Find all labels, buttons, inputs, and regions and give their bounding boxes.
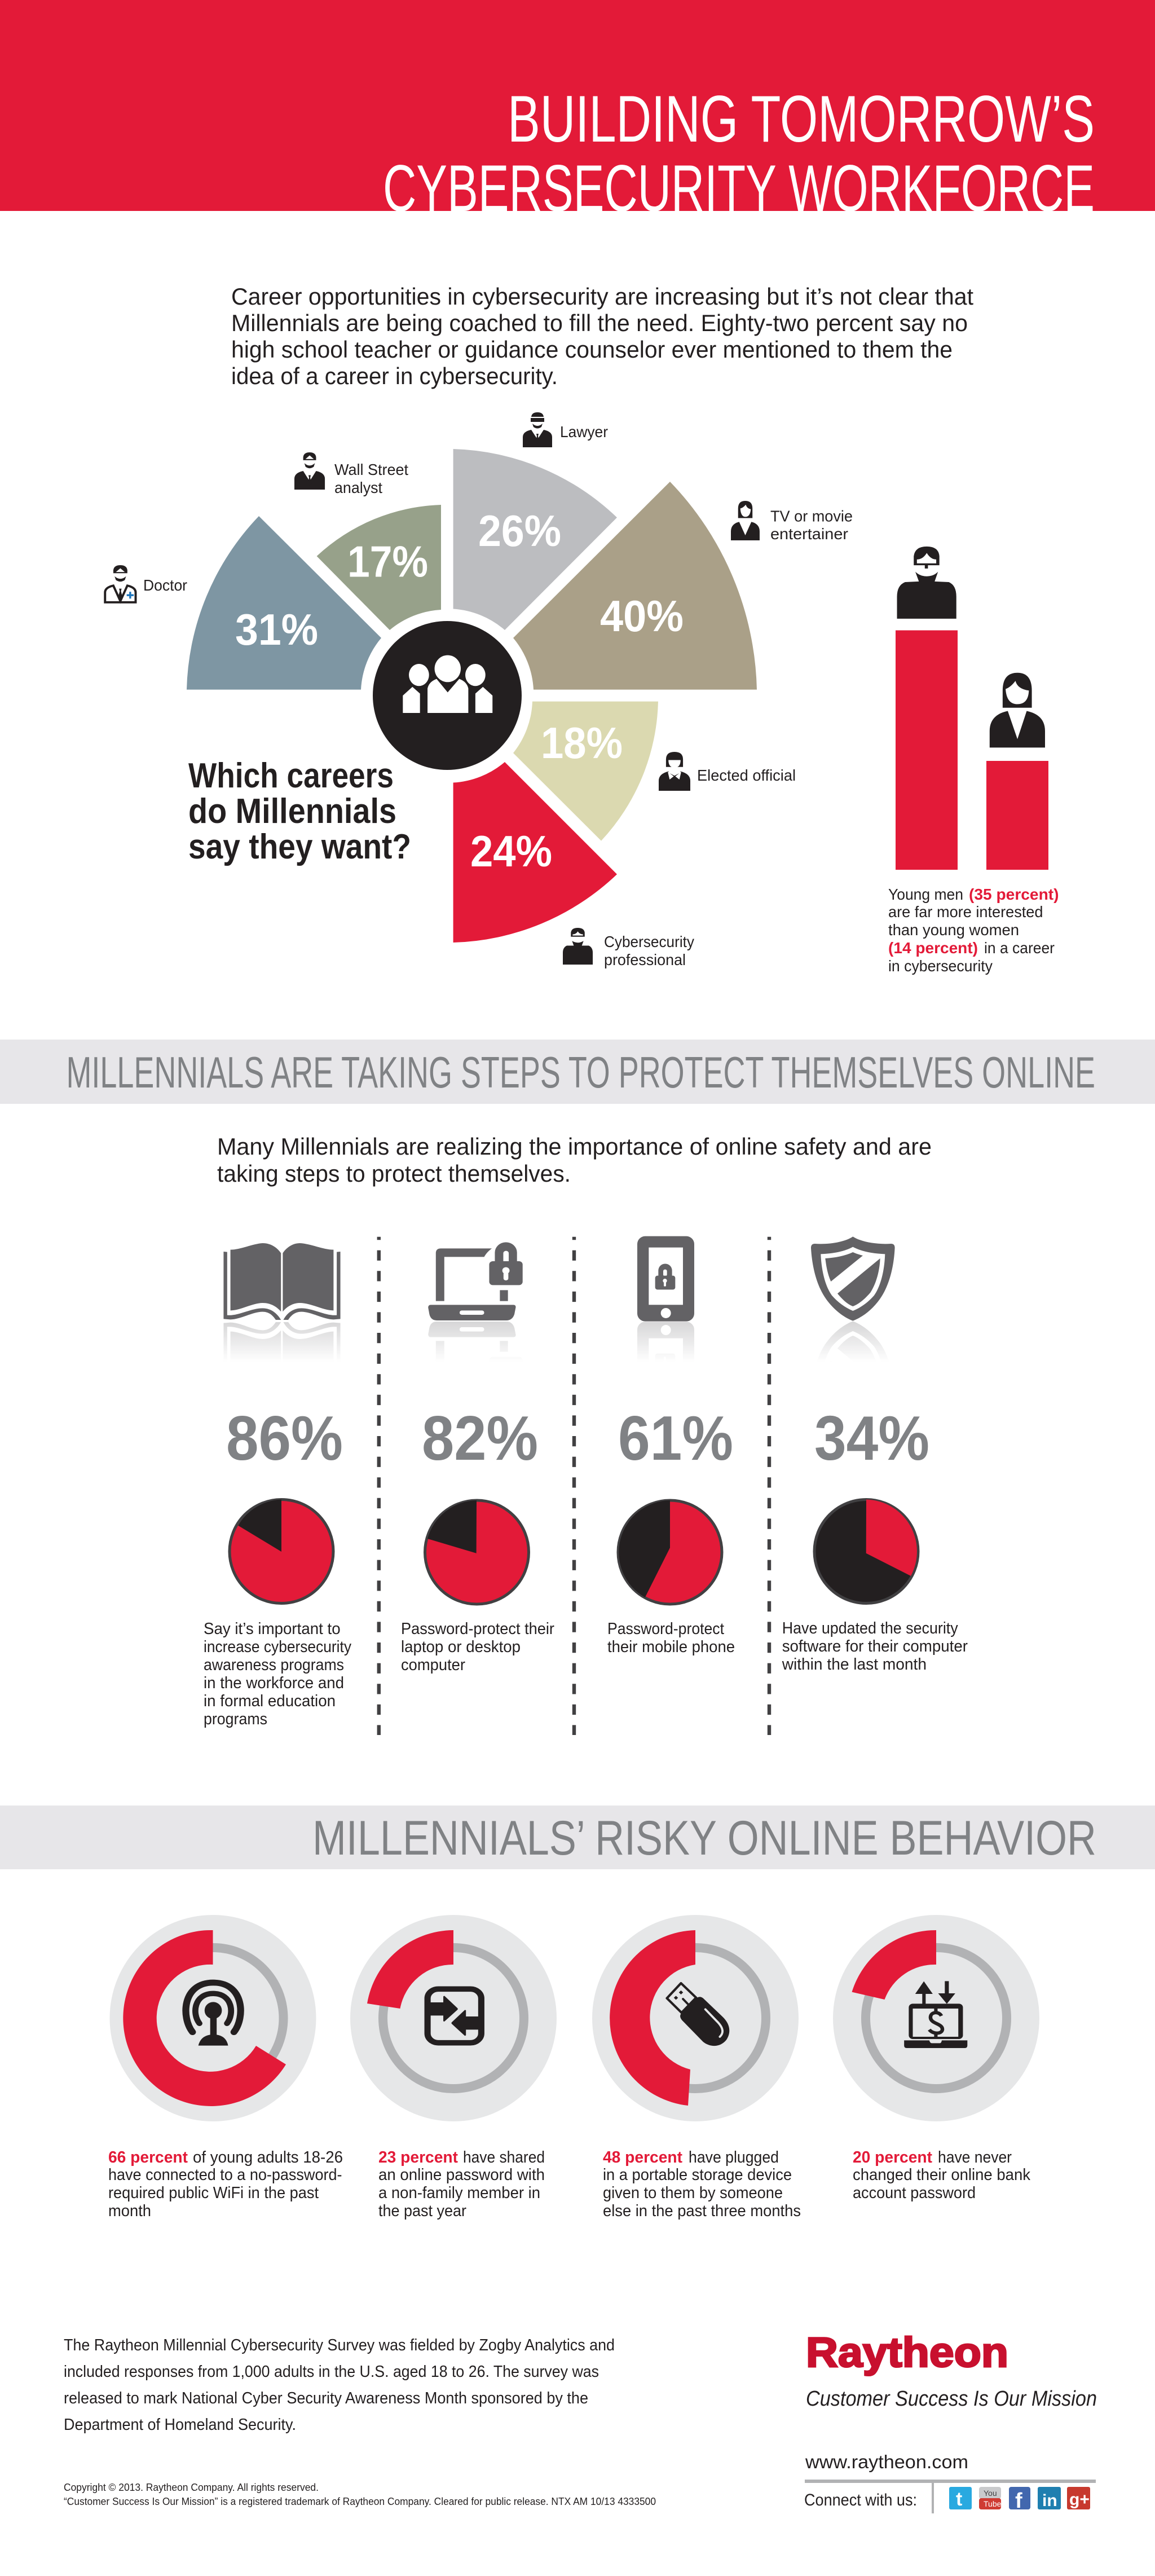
segment: cybersecurity professional 24%: 24% — [470, 826, 552, 876]
icon: shield — [811, 1236, 895, 1406]
label: TV or movie entertainer: entertainer — [770, 525, 848, 543]
icon: LinkedIn: in — [1042, 2491, 1057, 2510]
caption — [782, 1619, 968, 1674]
icon: YouTube: You — [984, 2489, 997, 2498]
caption: shared password — [378, 2148, 545, 2220]
column: updated security software 34% — [782, 1236, 968, 1674]
label: lawyer — [523, 412, 608, 447]
label: elected official: Elected official — [697, 767, 796, 784]
caption: shared password: an online password with — [378, 2166, 545, 2184]
text: young men callout: are far more interested — [888, 903, 1043, 921]
caption: portable storage: 48 percent — [603, 2148, 682, 2167]
intro text: Millennials are being coached to fill the need. Eighty-two percent say no — [231, 310, 968, 336]
tagline: Customer Success Is Our Mission — [806, 2387, 1097, 2411]
segment: lawyer 26% — [453, 449, 617, 630]
text: survey description — [64, 2336, 615, 2434]
icon: wifi antenna — [186, 1983, 241, 2046]
caption: WiFi: required public WiFi in the past — [108, 2184, 319, 2202]
segment: cybersecurity professional 24% — [453, 762, 617, 943]
caption: portable storage: else in the past three months — [603, 2202, 801, 2220]
stat 82%: 82% — [422, 1403, 538, 1473]
label: doctor: Doctor — [143, 576, 187, 594]
section intro: Many Millennials are realizing the importance of online safety and are — [217, 1133, 932, 1160]
segment: elected official 18%: 18% — [541, 718, 623, 768]
caption — [401, 1620, 554, 1674]
website: www.raytheon.com — [805, 2451, 968, 2472]
section intro: taking steps to protect themselves. — [217, 1160, 571, 1187]
icon: YouTube — [979, 2487, 1002, 2509]
header band — [0, 0, 1155, 225]
stat 61%: 61% — [618, 1403, 733, 1473]
caption: portable storage: have plugged — [689, 2148, 779, 2167]
column: password-protect laptop 82% — [401, 1242, 554, 1674]
caption: WiFi: 66 percent — [108, 2148, 188, 2167]
title — [383, 82, 1095, 225]
icon: man — [897, 547, 956, 619]
icon: Google Plus: g+ — [1069, 2490, 1090, 2509]
caption: in the workforce and — [204, 1674, 344, 1692]
text: young men callout: in a career — [984, 939, 1055, 957]
caption: shared password: 23 percent — [378, 2148, 458, 2167]
label: cybersecurity professional — [563, 928, 694, 968]
caption: in formal education — [204, 1692, 336, 1710]
chart: careers radial sectors — [187, 449, 757, 943]
icon: Facebook — [1009, 2487, 1030, 2513]
caption: Password-protect — [607, 1620, 724, 1638]
icon: book — [223, 1243, 341, 1399]
label: wall street analyst — [294, 452, 408, 496]
pie 86% — [230, 1499, 333, 1603]
donut: portable storage 48 percent — [592, 1915, 799, 2121]
text: survey description: released to mark National Cyber Security Awareness Month sponsored by the — [64, 2389, 588, 2407]
logo: Raytheon: Raytheon — [806, 2329, 1008, 2376]
intro text: high school teacher or guidance counselor ever mentioned to them the — [231, 336, 953, 363]
icon: woman — [990, 673, 1045, 747]
segment: wall street analyst 17% — [317, 505, 441, 630]
label: cybersecurity professional: professional — [604, 951, 686, 968]
caption: bank password: 20 percent — [853, 2148, 932, 2167]
segment: wall street analyst 17%: 17% — [347, 537, 428, 587]
caption: bank password: account password — [853, 2184, 976, 2202]
pie 61% — [618, 1500, 722, 1604]
label: cybersecurity professional: Cybersecurity — [604, 933, 694, 950]
intro text — [231, 283, 973, 389]
text: young men callout: (35 percent) — [969, 886, 1059, 903]
label: TV or movie entertainer — [731, 501, 853, 543]
caption: shared password: the past year — [378, 2202, 466, 2220]
caption: WiFi: have connected to a no-password- — [108, 2166, 342, 2184]
text: young men callout: Young men — [888, 886, 963, 903]
label: wall street analyst: analyst — [334, 479, 382, 496]
caption: software for their computer — [782, 1637, 968, 1655]
chart question: do Millennials — [188, 792, 396, 831]
donut: shared password 23 percent — [350, 1915, 557, 2121]
caption: Have updated the security — [782, 1619, 958, 1637]
caption: increase cybersecurity — [204, 1638, 351, 1656]
caption: programs — [204, 1710, 267, 1728]
caption: computer — [401, 1656, 465, 1674]
segment: elected official 18% — [513, 702, 658, 841]
stat 34%: 34% — [814, 1403, 929, 1473]
caption: WiFi — [108, 2148, 343, 2220]
intro text: Career opportunities in cybersecurity are increasing but it’s not clear that — [231, 283, 973, 310]
icon: group of people — [373, 621, 522, 770]
icon: phone with lock — [637, 1236, 694, 1407]
icon: USB drive — [667, 1983, 729, 2046]
text: copyright — [64, 2482, 656, 2507]
column: awareness programs 86% — [204, 1243, 351, 1728]
caption: Password-protect their — [401, 1620, 554, 1638]
bar: young men — [896, 631, 958, 870]
pie 34% — [814, 1499, 918, 1603]
label: TV or movie entertainer: TV or movie — [770, 508, 853, 525]
caption: bank password: have never — [938, 2148, 1012, 2167]
icon: YouTube: Tube — [984, 2499, 1002, 2508]
caption: laptop or desktop — [401, 1638, 521, 1656]
chart question — [188, 756, 411, 866]
label: lawyer: Lawyer — [560, 423, 608, 441]
label: doctor — [105, 565, 187, 602]
text: young men callout — [888, 886, 1059, 975]
caption: portable storage — [603, 2148, 801, 2220]
chart question: say they want? — [188, 827, 411, 866]
caption: portable storage: in a portable storage device — [603, 2166, 792, 2184]
pie 82% — [425, 1500, 529, 1604]
connect with us — [804, 2480, 1096, 2513]
bar: young women — [986, 761, 1048, 870]
donut: bank password 20 percent — [833, 1915, 1039, 2121]
column: password-protect phone 61% — [607, 1236, 735, 1656]
caption: portable storage: given to them by someone — [603, 2184, 783, 2202]
caption: WiFi: month — [108, 2202, 151, 2220]
icon: Twitter: t — [956, 2489, 962, 2510]
segment: doctor 31% — [187, 516, 381, 690]
text: copyright: Copyright © 2013. Raytheon Company. All rights reserved. — [64, 2482, 319, 2493]
icon: Facebook: f — [1015, 2489, 1022, 2513]
caption: shared password: have shared — [463, 2148, 545, 2167]
text: copyright: “Customer Success Is Our Mission” is a registered trademark of Raytheon Company. Cleared for public release. NTX AM 10/13 4333500 — [64, 2496, 656, 2507]
section intro — [217, 1133, 932, 1187]
segment: TV or movie entertainer 40%: 40% — [600, 591, 684, 641]
text: survey description: Department of Homeland Security. — [64, 2416, 296, 2434]
label: elected official — [659, 752, 796, 791]
icon: Twitter — [949, 2487, 972, 2510]
segment: TV or movie entertainer 40% — [513, 482, 757, 690]
section heading: risky online behavior — [0, 1806, 1155, 1869]
text: survey description: included responses from 1,000 adults in the U.S. aged 18 to 26. The survey was — [64, 2363, 599, 2381]
chart: young men vs young women — [896, 547, 1048, 870]
caption: WiFi: of young adults 18-26 — [193, 2148, 343, 2167]
text: young men callout: (14 percent) — [888, 939, 978, 957]
caption: Say it’s important to — [204, 1620, 341, 1638]
icon: laptop with lock — [428, 1242, 523, 1400]
caption: bank password: changed their online bank — [853, 2166, 1030, 2184]
chart question: Which careers — [188, 756, 394, 795]
caption: bank password — [853, 2148, 1030, 2202]
segment: doctor 31%: 31% — [235, 605, 318, 654]
icon: laptop with dollar and arrows — [904, 1981, 967, 2048]
text: young men callout: in cybersecurity — [888, 957, 993, 975]
text: young men callout: than young women — [888, 921, 1019, 939]
caption: their mobile phone — [607, 1638, 735, 1656]
connect with us: Connect with us: — [804, 2491, 917, 2509]
icon: password exchange — [427, 1989, 481, 2043]
caption: within the last month — [782, 1655, 927, 1674]
segment: lawyer 26%: 26% — [478, 506, 561, 556]
text: survey description: The Raytheon Millennial Cybersecurity Survey was fielded by Zogby Analytics and — [64, 2336, 615, 2354]
label: wall street analyst: Wall Street — [334, 461, 408, 478]
caption — [607, 1620, 735, 1656]
caption: shared password: a non-family member in — [378, 2184, 540, 2202]
caption — [204, 1620, 351, 1728]
icon: LinkedIn — [1038, 2487, 1061, 2510]
donut: public WiFi 66 percent — [109, 1915, 316, 2121]
intro text: idea of a career in cybersecurity. — [231, 363, 558, 389]
caption: awareness programs — [204, 1656, 344, 1674]
stat 86%: 86% — [226, 1403, 343, 1473]
